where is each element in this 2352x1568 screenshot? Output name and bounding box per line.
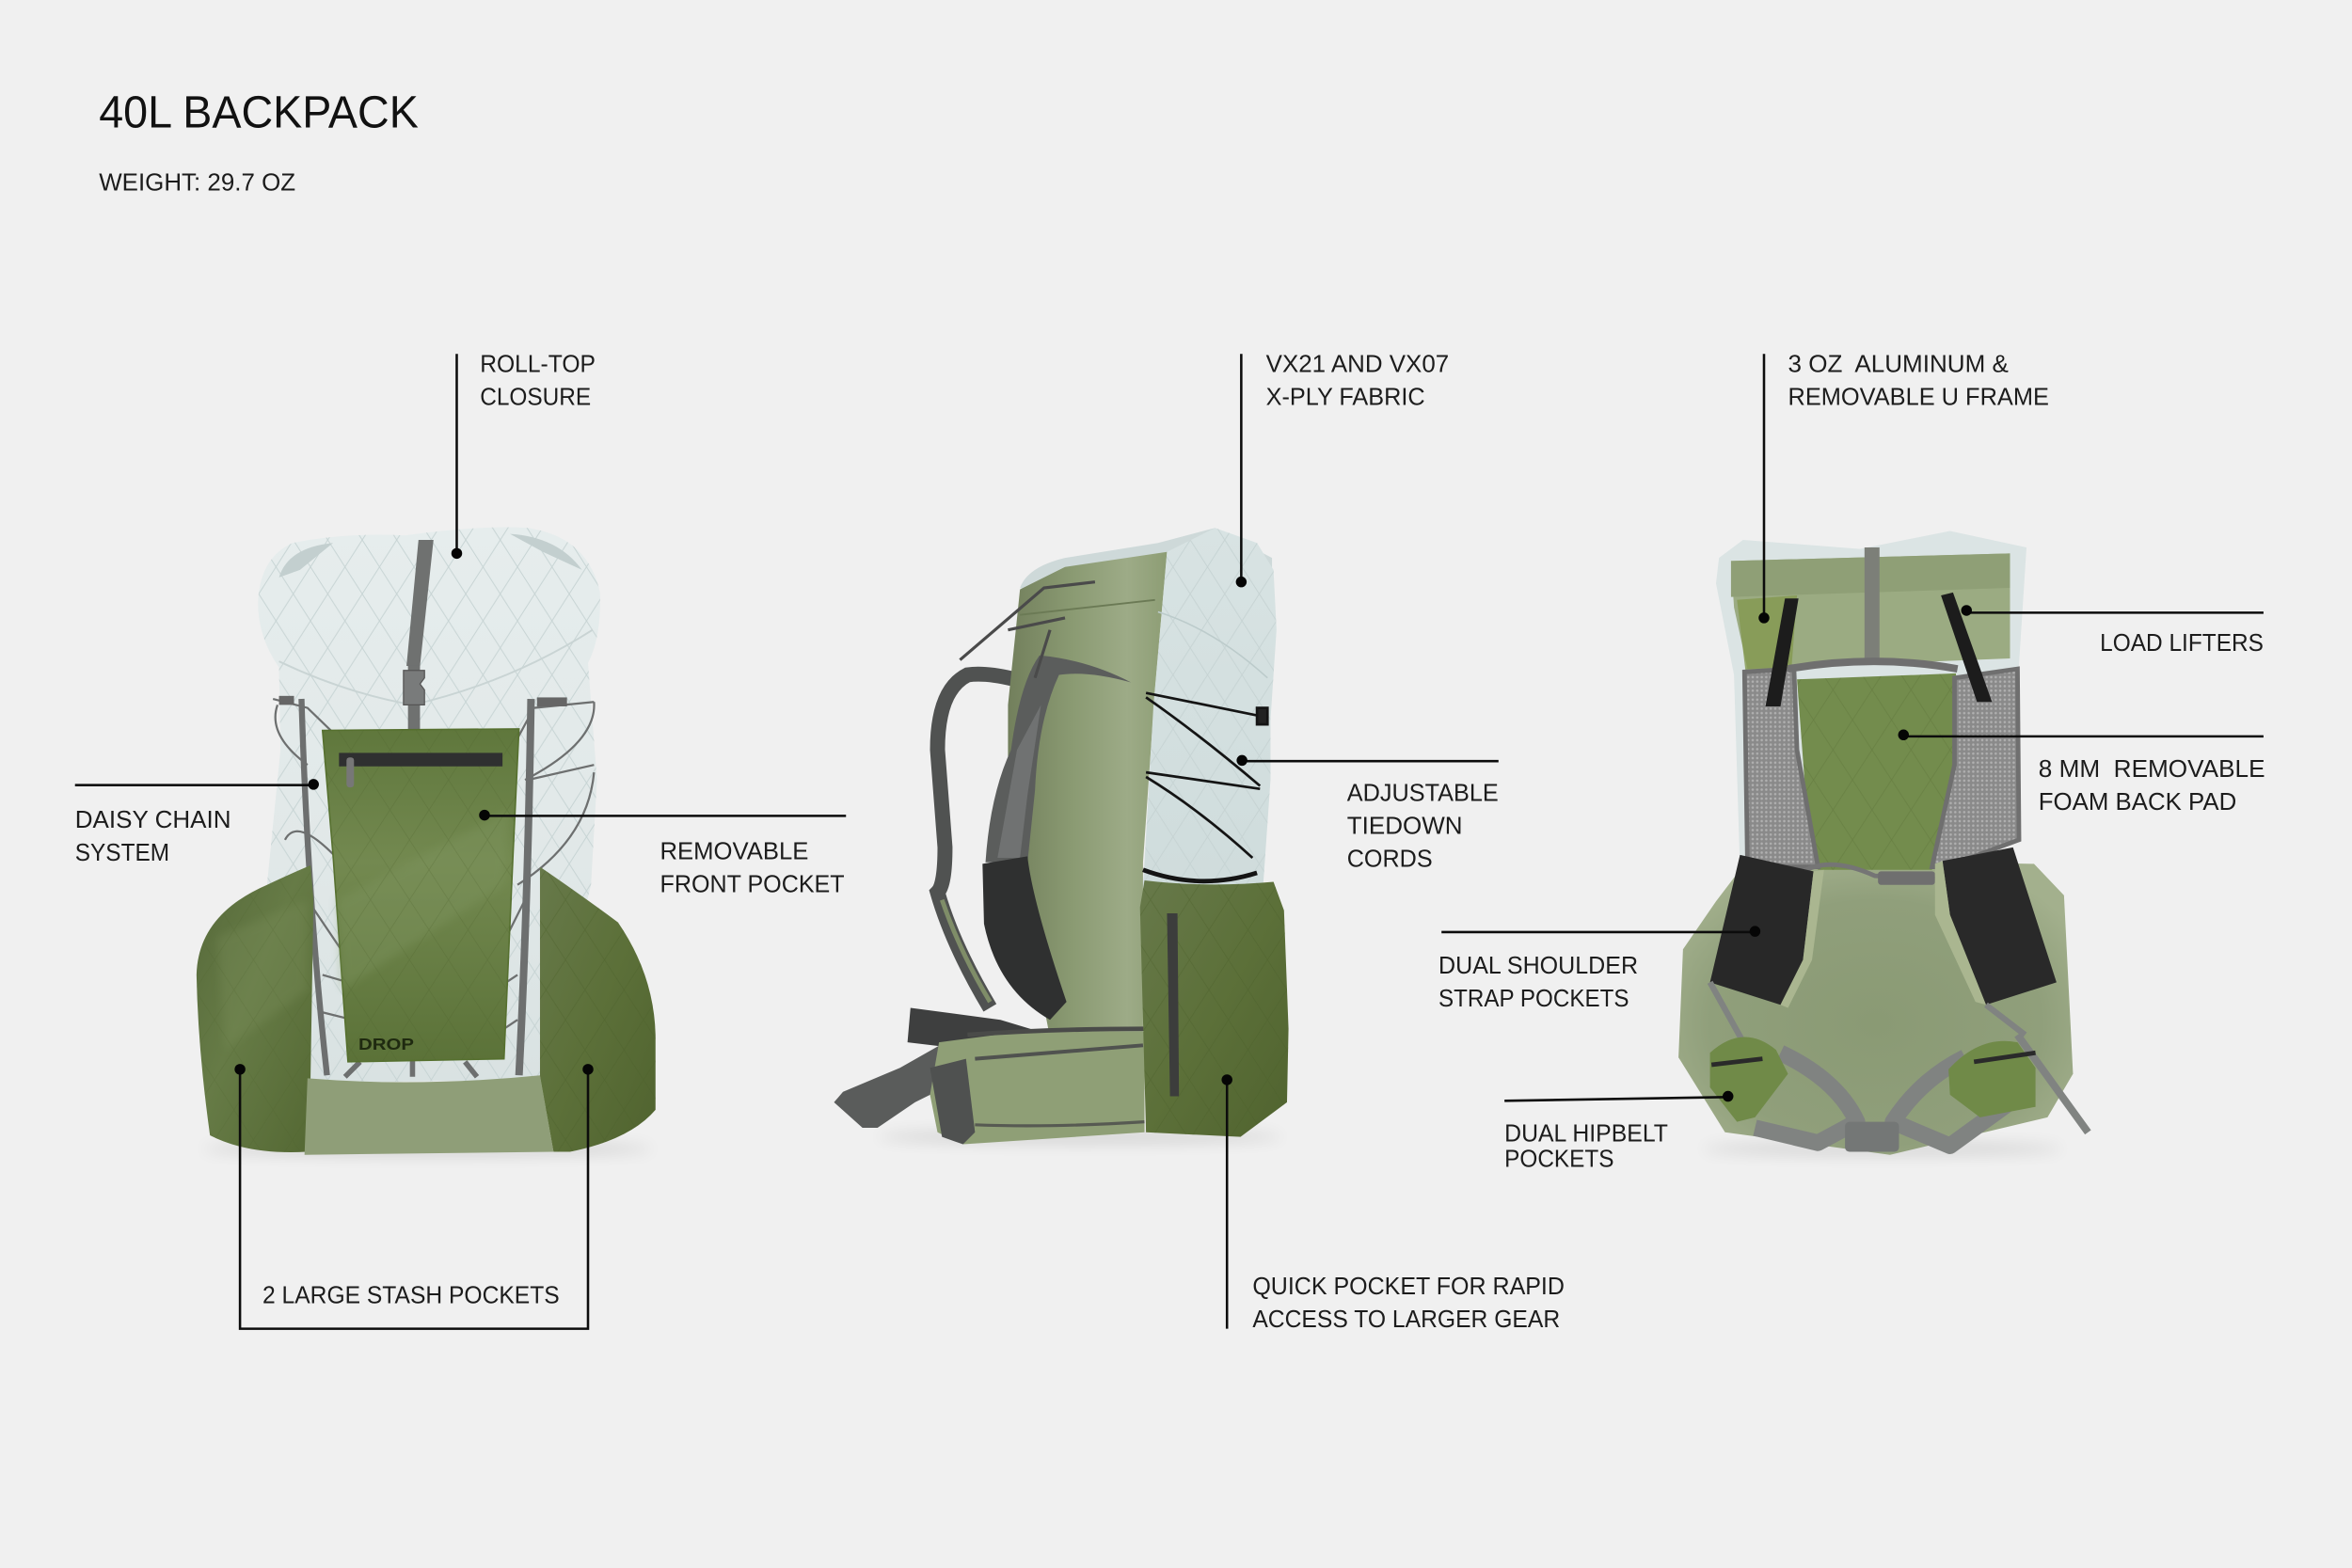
callout: daisy chain system — [75, 779, 319, 866]
callout: removable front pocket: REMOVABLE — [660, 837, 808, 865]
callout: quick pocket: QUICK POCKET FOR RAPID — [1252, 1272, 1565, 1300]
callout: fabric — [1236, 349, 1449, 587]
white roll-top body — [258, 528, 600, 1083]
callout: U frame — [1758, 349, 2049, 624]
removable front pocket — [323, 729, 519, 1062]
shoulder harness left — [1744, 669, 1818, 867]
callout: removable front pocket: FRONT POCKET — [660, 870, 845, 898]
hipbelt — [834, 1007, 1145, 1145]
callout: roll-top closure: CLOSURE — [480, 383, 591, 411]
olive upper panel — [1731, 553, 2010, 669]
callout: foam back pad: 8 MM REMOVABLE — [2039, 754, 2265, 783]
roll-top strap and buckle — [404, 540, 434, 732]
sternum strap — [1792, 864, 1935, 879]
callout: tiedown cords: ADJUSTABLE — [1347, 778, 1499, 806]
callout: fabric: X-PLY FABRIC — [1266, 383, 1425, 411]
black mesh pocket — [982, 856, 1067, 1020]
callout: tiedown cords: TIEDOWN — [1347, 812, 1463, 840]
pocket zipper — [1167, 913, 1179, 1097]
DROP logo: DROP — [358, 1035, 414, 1053]
callout: foam back pad: FOAM BACK PAD — [2039, 787, 2236, 816]
left stash pocket — [197, 865, 313, 1152]
callout: dual shoulder strap pockets: STRAP POCKETS — [1438, 984, 1629, 1012]
callout: quick pocket: ACCESS TO LARGER GEAR — [1252, 1305, 1560, 1333]
callout: tiedown cords — [1236, 755, 1499, 873]
title: 40L BACKPACK — [99, 88, 419, 138]
callout: foam back pad — [1899, 730, 2265, 816]
near shoulder strap — [986, 656, 1131, 863]
callout: dual shoulder strap pockets — [1438, 926, 1760, 1012]
callout: load lifters — [1962, 605, 2264, 657]
callout: roll-top closure — [452, 349, 596, 559]
callout: dual hipbelt pockets — [1504, 1091, 1733, 1172]
weight: WEIGHT: 29.7 OZ — [99, 168, 295, 197]
load lifters — [1766, 593, 1992, 706]
callout: fabric: VX21 AND VX07 — [1266, 349, 1449, 377]
white side panel — [1143, 528, 1277, 888]
cords and daisy chain — [273, 696, 595, 1077]
callout: 2 large stash pockets — [234, 1064, 594, 1329]
shoulder harness right — [1932, 669, 2019, 867]
waist buckle — [1845, 1122, 1899, 1152]
olive back panel — [1008, 552, 1167, 1037]
backpack: front view — [197, 528, 656, 1155]
callout: U frame: 3 OZ ALUMINUM & — [1788, 349, 2009, 377]
hipbelt pockets — [1710, 1037, 2036, 1122]
quick pocket — [1140, 880, 1289, 1137]
stash pockets body — [1678, 863, 2073, 1155]
tiedown cords — [1143, 693, 1267, 881]
backpack: side view — [834, 528, 1289, 1145]
callout: daisy chain system: SYSTEM — [75, 838, 169, 866]
callout: quick pocket — [1221, 1074, 1565, 1333]
white fabric behind — [1716, 531, 2026, 870]
center strap — [1865, 547, 1880, 660]
callout: 2 large stash pockets: 2 LARGE STASH POCKETS — [262, 1281, 560, 1309]
right stash pocket — [540, 867, 656, 1152]
callout: dual hipbelt pockets: DUAL HIPBELT — [1504, 1118, 1668, 1147]
callout: U frame: REMOVABLE U FRAME — [1788, 383, 2049, 411]
callout: dual hipbelt pockets: POCKETS — [1504, 1144, 1614, 1172]
dual shoulder pockets — [1710, 847, 2057, 1007]
back pad — [1797, 673, 1956, 870]
callout: removable front pocket — [479, 810, 846, 898]
callout: daisy chain system: DAISY CHAIN — [75, 805, 231, 833]
backpack: back view — [1678, 531, 2088, 1155]
callout: roll-top closure: ROLL-TOP — [480, 349, 596, 377]
rolled top — [1020, 528, 1272, 600]
rear shoulder strap — [937, 674, 1057, 1007]
callout: dual shoulder strap pockets: DUAL SHOULDER — [1438, 951, 1638, 979]
zipper — [339, 752, 502, 767]
callout: load lifters: LOAD LIFTERS — [2100, 628, 2264, 657]
hipbelt straps — [1710, 982, 2088, 1146]
bottom panel — [305, 1075, 553, 1155]
callout: tiedown cords: CORDS — [1347, 845, 1433, 873]
load lifter straps — [960, 582, 1095, 678]
